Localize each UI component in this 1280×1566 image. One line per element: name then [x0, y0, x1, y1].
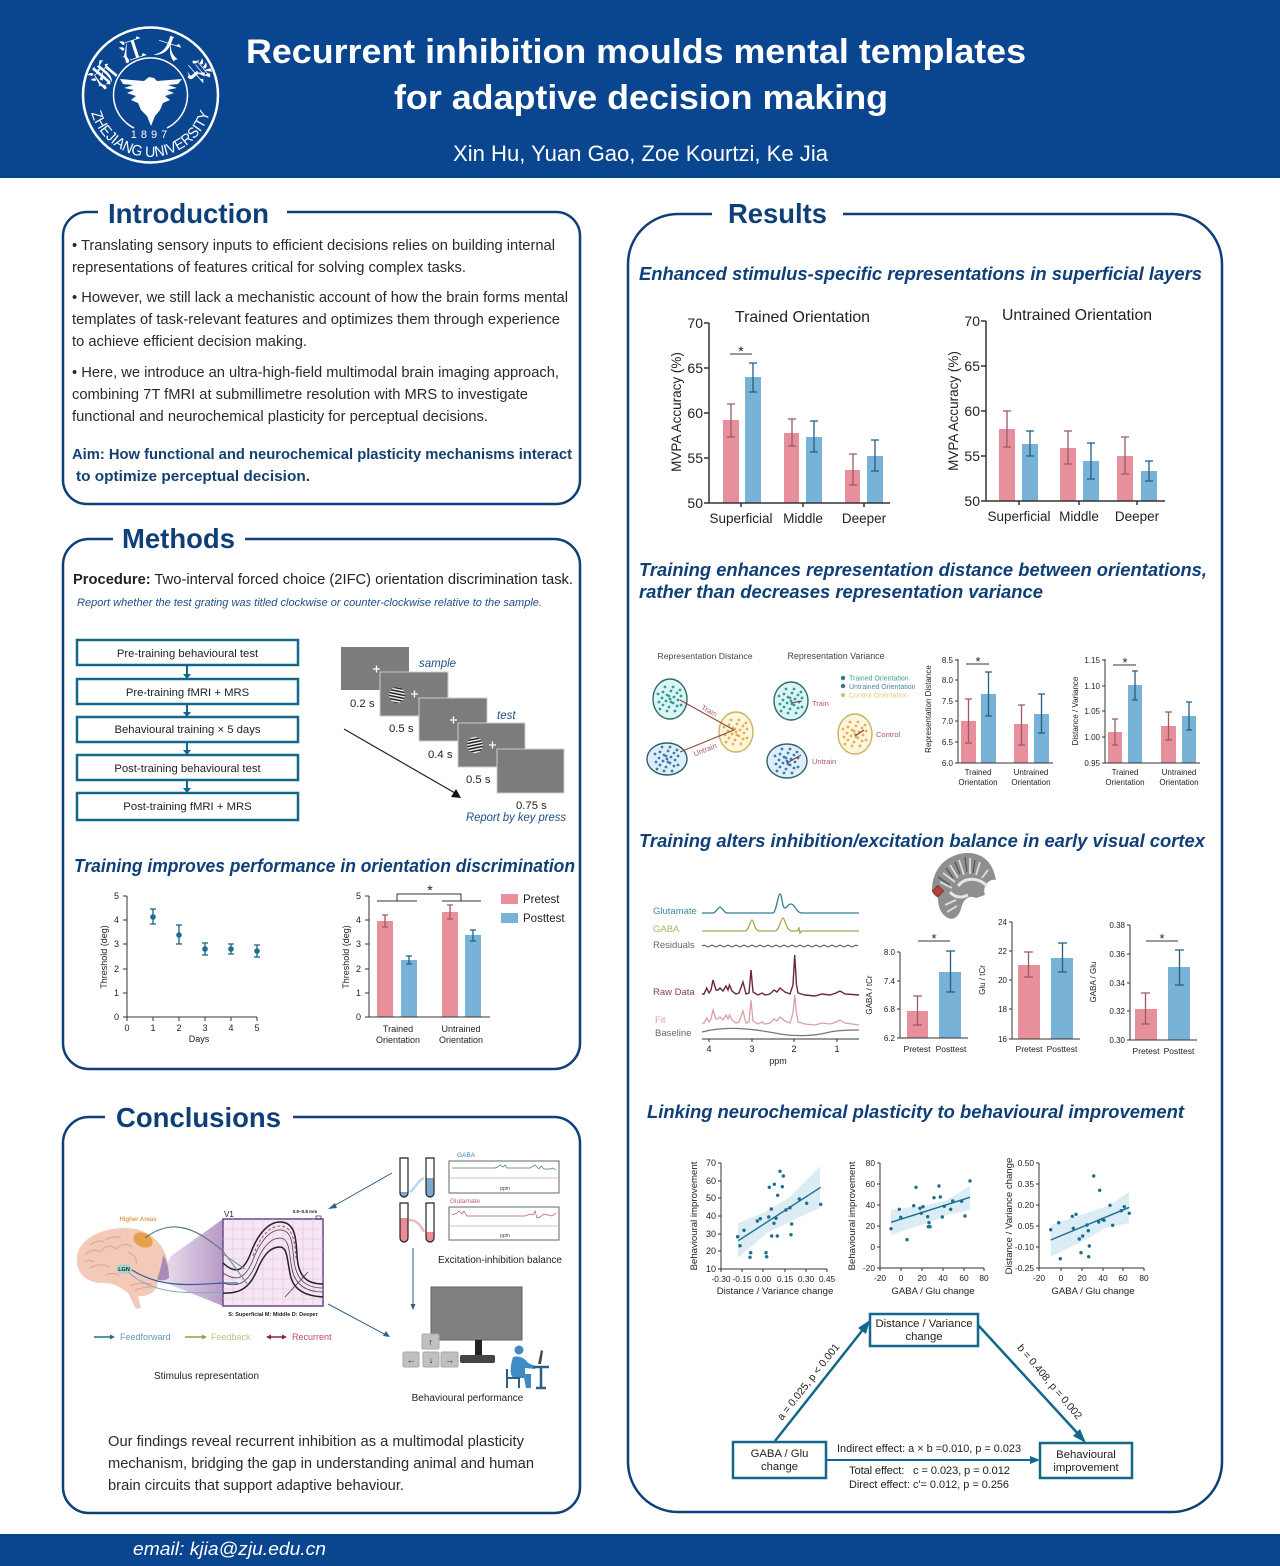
legend: pretest/posttest: Pretest [523, 894, 560, 906]
bar chart: trained orientation: Superficial [709, 511, 773, 526]
diagram: behavioural performance: ↑ [428, 1337, 433, 1347]
bar chart: Glu tCr: Posttest [1047, 1044, 1078, 1054]
bar chart: distance variance: 1.10 [1084, 682, 1101, 691]
scatter plot: behaviour vs GABA Glu: GABA / Glu change [891, 1286, 975, 1297]
scatter plot: behaviour vs GABA Glu: Behavioural improvement [847, 1161, 858, 1270]
bar chart: threshold pre/post: 4 [356, 915, 361, 925]
bar chart: distance variance: 1.05 [1084, 707, 1101, 716]
flowchart: training procedure: Post-training behavioural test [114, 763, 262, 775]
mediation diagram: Total effect: c = 0.023, p = 0.012 [849, 1465, 1010, 1477]
conclusion text: brain circuits that support adaptive behaviour. [108, 1478, 404, 1494]
bar chart: trained orientation: Middle [783, 511, 823, 526]
legend: connection types: Recurrent [292, 1332, 332, 1342]
task timeline: 0.5 s [466, 774, 491, 786]
line chart: threshold by day: 3 [202, 1023, 208, 1033]
scatter plot: distance variance vs GABA Glu: 0.05 [1018, 1221, 1034, 1231]
university logo [80, 26, 221, 164]
bar chart: GABA Glu: 0.38 [1109, 921, 1126, 930]
legend: connection types: Feedforward [120, 1332, 171, 1342]
bar chart: trained orientation: 50 [687, 495, 703, 511]
diagram: representation distance and variance: Untrain [812, 757, 836, 766]
bar chart: Glu tCr: 16 [998, 1035, 1008, 1044]
line chart: threshold by day: 4 [228, 1023, 234, 1033]
mediation diagram: GABA / Glu [751, 1448, 808, 1460]
bar chart: distance variance: 1.15 [1084, 656, 1101, 665]
spectra: GABA and glutamate: ppm [500, 1186, 510, 1192]
bar chart: GABA Glu: 0.36 [1109, 950, 1126, 959]
scatter plot: distance variance vs GABA Glu: Distance / Variance change [1004, 1158, 1015, 1274]
bar chart: representation distance: 6.0 [942, 759, 954, 768]
scatter plot: behaviour vs GABA Glu: 60 [866, 1179, 875, 1189]
subheading: training improves performance: Training improves performance in orientation discrimination [74, 856, 575, 876]
university logo: 江 [114, 28, 149, 70]
bar chart: representation distance: 7.0 [942, 717, 954, 726]
mediation diagram: b = 0.408, p = 0.002 [1014, 1342, 1084, 1422]
scatter plot: distance variance vs GABA Glu: -0.25 [1015, 1263, 1034, 1273]
scatter plot: behaviour vs GABA Glu [847, 1158, 989, 1297]
spectra: GABA and glutamate [449, 1152, 559, 1240]
introduction text: combining 7T fMRI at submillimetre resolution with MRS to investigate [72, 387, 528, 403]
legend: orientations: Untrained Orientation [849, 684, 916, 691]
scatter plot: behaviour vs distance variance [689, 1158, 835, 1297]
scatter plot: behaviour vs distance variance: 40 [706, 1211, 716, 1221]
conclusion text: mechanism, bridging the gap in understanding animal and human [108, 1456, 534, 1472]
subheading: linking plasticity: Linking neurochemical plasticity to behavioural improvement [647, 1101, 1185, 1122]
title: Recurrent inhibition moulds mental templates [246, 33, 1026, 71]
bar chart: trained orientation: 60 [687, 405, 703, 421]
bar chart: trained orientation: MVPA Accuracy (%) [669, 352, 684, 472]
mediation diagram: Direct effect: c'= 0.012, p = 0.256 [849, 1479, 1009, 1491]
scatter plot: behaviour vs GABA Glu: 0 [870, 1242, 875, 1252]
bar chart: untrained orientation: Middle [1059, 509, 1099, 524]
line chart: threshold by day: 5 [114, 891, 119, 901]
bar chart: distance variance: * [1122, 655, 1128, 670]
task timeline: 0.75 s [516, 800, 547, 812]
bar chart: representation distance: * [975, 654, 981, 669]
bar chart: Glu tCr: 22 [998, 947, 1008, 956]
bar chart: trained orientation: 55 [687, 450, 703, 466]
mediation diagram: a = 0.025, p < 0.001 [775, 1341, 842, 1423]
diagram: representation distance and variance: Train [700, 703, 719, 719]
scatter plot: behaviour vs distance variance: 50 [706, 1193, 716, 1203]
scatter plot: behaviour vs GABA Glu: -20 [874, 1273, 886, 1283]
bar chart: untrained orientation: Deeper [1115, 509, 1160, 524]
bar chart: GABA tCr: 8.0 [884, 948, 896, 957]
line chart: threshold by day: Threshold (deg) [99, 925, 109, 989]
heading: conclusions: Conclusions [116, 1102, 281, 1133]
diagram: excitation-inhibition balance: Excitation-inhibition balance [438, 1255, 562, 1266]
bar chart: distance variance: 0.95 [1084, 759, 1101, 768]
bar chart: GABA Glu: GABA / Glu [1089, 962, 1098, 1002]
bar chart: threshold pre/post: Orientation [376, 1035, 420, 1045]
scatter plot: behaviour vs distance variance: -0.30 [711, 1274, 731, 1284]
bar chart: untrained orientation: 70 [964, 313, 980, 329]
legend: pretest/posttest [501, 894, 565, 925]
diagram: behavioural performance: Behavioural performance [412, 1393, 524, 1404]
line chart: threshold by day: 1 [114, 988, 119, 998]
scatter plot: distance variance vs GABA Glu: 0.35 [1018, 1179, 1034, 1189]
diagram: stimulus representation: LGN [118, 1267, 130, 1273]
bar chart: representation distance: 8.5 [942, 656, 954, 665]
panel: introduction [63, 198, 580, 504]
scatter plot: behaviour vs distance variance: Distance / Variance change [717, 1286, 833, 1297]
university logo: 学 [177, 50, 221, 93]
scatter plot: behaviour vs GABA Glu: 40 [938, 1273, 948, 1283]
subheading: superficial layers: Enhanced stimulus-specific representations in superficial layers [639, 263, 1202, 284]
diagram: excitation-inhibition balance [328, 1152, 562, 1337]
scatter plot: distance variance vs GABA Glu: 0 [1059, 1273, 1064, 1283]
scatter plot: distance variance vs GABA Glu: -0.10 [1015, 1242, 1034, 1252]
contact email: email: kjia@zju.edu.cn [133, 1539, 326, 1559]
diagram: representation distance and variance: Representation Distance [657, 651, 753, 661]
subheading: representation distance [639, 559, 1207, 602]
scatter plot: behaviour vs GABA Glu: 20 [917, 1273, 927, 1283]
bar chart: GABA Glu: 0.32 [1109, 1007, 1126, 1016]
bar chart: threshold pre/post: Untrained [441, 1024, 481, 1034]
diagram: representation distance and variance: Untrain [692, 741, 718, 758]
bar chart: representation distance: Trained [965, 768, 991, 777]
subheading: representation distance: rather than decreases representation variance [639, 581, 1043, 602]
scatter plot: behaviour vs distance variance: 30 [706, 1229, 716, 1239]
MRS spectra: 2 [791, 1044, 797, 1054]
scatter plot: distance variance vs GABA Glu: 20 [1077, 1273, 1087, 1283]
scatter plot: behaviour vs distance variance: 0.30 [798, 1274, 814, 1284]
scatter plot: behaviour vs distance variance: 0.00 [755, 1274, 771, 1284]
icon: person at desk [507, 1346, 549, 1388]
MRS spectra: 4 [706, 1044, 712, 1054]
subheading: representation distance: Training enhances representation distance between orientations, [639, 559, 1207, 580]
legend: orientations: Trained Orientation [849, 676, 909, 682]
bar chart: Glu tCr: Pretest [1016, 1044, 1043, 1054]
aim statement [72, 447, 572, 485]
panel: results [628, 198, 1222, 1512]
task timeline [341, 647, 566, 824]
bar chart: representation distance: 8.0 [942, 676, 954, 685]
bar chart: threshold pre/post: * [427, 882, 433, 898]
bar chart: trained orientation: Trained Orientation [735, 309, 870, 326]
V1 box [223, 1209, 323, 1318]
mediation diagram: Behavioural [1056, 1449, 1116, 1461]
MRS spectra: Fit [655, 1015, 666, 1026]
scatter plot: behaviour vs distance variance: 10 [706, 1264, 716, 1274]
mediation diagram: Distance / Variance [875, 1318, 973, 1330]
introduction text: representations of features critical for solving complex tasks. [72, 260, 466, 276]
scatter plot: behaviour vs GABA Glu: 80 [979, 1273, 989, 1283]
scatter plot: behaviour vs GABA Glu: 40 [866, 1200, 875, 1210]
bar chart: GABA tCr: GABA / tCr [865, 975, 874, 1015]
scatter plot: distance variance vs GABA Glu: 0.20 [1018, 1200, 1034, 1210]
scatter plot: distance variance vs GABA Glu: GABA / Glu change [1051, 1286, 1135, 1297]
bar chart: untrained orientation: MVPA Accuracy (%) [946, 351, 961, 471]
MRS spectra: Raw Data [653, 987, 695, 998]
conclusion text [108, 1434, 534, 1494]
bar chart: GABA Glu [1089, 921, 1197, 1056]
diagram: behavioural performance: ← [406, 1355, 416, 1365]
bar chart: threshold pre/post: 2 [356, 964, 361, 974]
MRS spectra: Residuals [653, 940, 695, 951]
MRS spectra: Baseline [655, 1028, 691, 1039]
task timeline: 0.5 s [389, 723, 414, 735]
scatter plot: behaviour vs distance variance: 70 [706, 1158, 716, 1168]
bar chart: threshold pre/post [341, 882, 565, 1045]
task timeline: 0.2 s [350, 698, 375, 710]
scatter plot: behaviour vs GABA Glu: 60 [959, 1273, 969, 1283]
line chart: threshold by day [99, 891, 260, 1044]
diagram: stimulus representation: Stimulus representation [154, 1371, 259, 1382]
bar chart: Glu tCr [978, 918, 1080, 1054]
panel: conclusions [63, 1102, 580, 1513]
flowchart: training procedure: Post-training fMRI + MRS [123, 801, 252, 813]
spectra: GABA and glutamate: ppm [500, 1233, 510, 1239]
scatter plot: distance variance vs GABA Glu [1004, 1158, 1149, 1297]
legend: connection types: Feedback [211, 1332, 251, 1342]
procedure text: Procedure: Two-interval forced choice (2IFC) orientation discrimination task. [73, 571, 573, 588]
bar chart: distance variance: 1.00 [1084, 733, 1101, 742]
bar chart: threshold pre/post: Trained [383, 1024, 413, 1034]
diagram: representation distance and variance: Representation Variance [787, 651, 885, 661]
procedure text [73, 571, 573, 609]
V1 box: S: Superficial M: Middle D: Deeper [228, 1312, 319, 1318]
university logo: 大 [152, 26, 186, 68]
title [246, 33, 1026, 117]
scatter plot: behaviour vs GABA Glu: 0 [899, 1273, 904, 1283]
aim statement: to optimize perceptual decision. [76, 469, 310, 485]
bar chart: threshold pre/post: 0 [356, 1012, 361, 1022]
legend: orientations [841, 676, 916, 700]
MRS spectra: GABA [653, 924, 680, 935]
bar chart: untrained orientation: Untrained Orientation [1002, 307, 1152, 324]
bar chart: threshold pre/post: 5 [356, 891, 361, 901]
bar chart: Glu tCr: Glu / tCr [978, 965, 987, 995]
bar chart: representation distance: Orientation [958, 778, 998, 787]
line chart: threshold by day: 0 [114, 1012, 119, 1022]
mediation diagram [733, 1314, 1132, 1491]
scatter plot: distance variance vs GABA Glu: 60 [1118, 1273, 1128, 1283]
scatter plot: behaviour vs GABA Glu: 20 [866, 1221, 875, 1231]
bar chart: untrained orientation: 50 [964, 493, 980, 509]
bar chart: representation distance: Representation Distance [924, 665, 933, 753]
introduction text: templates of task-relevant features and optimizes them through experience [72, 312, 560, 328]
authors: Xin Hu, Yuan Gao, Zoe Kourtzi, Ke Jia [453, 141, 829, 166]
bar chart: threshold pre/post: 1 [356, 988, 361, 998]
task timeline: 0.4 s [428, 749, 453, 761]
line chart: threshold by day: 5 [254, 1023, 260, 1033]
introduction text: • However, we still lack a mechanistic account of how the brain forms mental [72, 290, 568, 306]
procedure text: Report whether the test grating was titled clockwise or counter-clockwise relative to the sample. [77, 597, 542, 609]
bar chart: distance variance: Untrained [1162, 768, 1196, 777]
bar chart: GABA Glu: 0.30 [1109, 1036, 1126, 1045]
bar chart: distance variance: Trained [1112, 768, 1138, 777]
university logo: 1897 [131, 129, 171, 141]
introduction text: to achieve efficient decision making. [72, 334, 307, 350]
task timeline: test [497, 710, 516, 722]
bar chart: untrained orientation: 60 [964, 403, 980, 419]
scatter plot: distance variance vs GABA Glu: 40 [1098, 1273, 1108, 1283]
bar chart: GABA tCr: Posttest [936, 1044, 967, 1054]
scatter plot: behaviour vs distance variance: 0.45 [819, 1274, 835, 1284]
spectra: GABA and glutamate: GABA [457, 1152, 476, 1159]
bar chart: threshold pre/post: 3 [356, 939, 361, 949]
bar chart: Glu tCr: 18 [998, 1005, 1008, 1014]
task timeline: Report by key press [466, 812, 566, 824]
mediation diagram: change [905, 1331, 943, 1343]
header banner [0, 0, 1280, 178]
diagram: stimulus representation [77, 1209, 332, 1382]
flowchart: training procedure: Pre-training behavioural test [117, 648, 259, 660]
scatter plot: behaviour vs GABA Glu: 80 [866, 1158, 875, 1168]
bar chart: GABA tCr: 7.4 [884, 977, 896, 986]
university logo: 浙 [80, 53, 124, 96]
MRS spectra: 3 [749, 1044, 755, 1054]
introduction text: functional and neurochemical plasticity for perceptual decisions. [72, 409, 488, 425]
line chart: threshold by day: 2 [114, 964, 119, 974]
scatter plot: behaviour vs distance variance: Behavioural improvement [689, 1161, 700, 1270]
bar chart: threshold pre/post: Threshold (deg) [341, 925, 351, 989]
bar chart: trained orientation: * [738, 343, 744, 359]
mediation diagram: Indirect effect: a × b =0.010, p = 0.023 [837, 1443, 1021, 1455]
bar chart: GABA tCr: 6.8 [884, 1005, 896, 1014]
diagram: behavioural performance: → [445, 1355, 454, 1365]
panel: methods [63, 523, 580, 1069]
bar chart: untrained orientation [946, 307, 1165, 524]
bar chart: distance variance: Orientation [1159, 778, 1199, 787]
introduction text: • Here, we introduce an ultra-high-field multimodal brain imaging approach, [72, 365, 559, 381]
bar chart: representation distance: Untrained [1014, 768, 1048, 777]
mediation diagram: change [761, 1461, 798, 1473]
bar chart: representation distance: 7.5 [942, 697, 954, 706]
diagram: representation distance and variance [647, 651, 916, 778]
V1 box: V1 [224, 1210, 234, 1219]
bar chart: representation distance [924, 654, 1053, 787]
spectra: GABA and glutamate: Glutamate [450, 1198, 480, 1205]
bar chart: threshold pre/post: Orientation [439, 1035, 483, 1045]
bar chart: trained orientation: 70 [687, 315, 703, 331]
bar chart: trained orientation [669, 309, 890, 526]
MRS spectra [653, 894, 859, 1066]
bar chart: GABA Glu: Posttest [1164, 1046, 1195, 1056]
bar chart: trained orientation: 65 [687, 360, 703, 376]
scatter plot: distance variance vs GABA Glu: 0.50 [1018, 1158, 1034, 1168]
line chart: threshold by day: 4 [114, 915, 119, 925]
introduction text [72, 238, 568, 425]
label: higher areas: Higher Areas [119, 1217, 157, 1223]
aim statement: Aim: How functional and neurochemical plasticity mechanisms interact [72, 447, 572, 463]
diagram: representation distance and variance: Control [876, 730, 901, 739]
mediation diagram: improvement [1053, 1462, 1120, 1474]
diagram: representation distance and variance: Train [812, 699, 829, 708]
scatter plot: distance variance vs GABA Glu: 80 [1139, 1273, 1149, 1283]
line chart: threshold by day: Days [189, 1034, 210, 1044]
heading: methods: Methods [122, 523, 235, 554]
V1 box: 0.5~0.8 mm [293, 1209, 317, 1214]
bar chart: GABA tCr: 6.2 [884, 1034, 896, 1043]
subheading: inhibition excitation: Training alters inhibition/excitation balance in early visual cortex [639, 830, 1206, 851]
MRS spectra: ppm [769, 1056, 787, 1066]
bar chart: distance variance [1071, 655, 1200, 787]
bar chart: GABA tCr: Pretest [904, 1044, 931, 1054]
MRS spectra: Glutamate [653, 906, 697, 917]
scatter plot: behaviour vs distance variance: 0.15 [777, 1274, 793, 1284]
conclusion text: Our findings reveal recurrent inhibition as a multimodal plasticity [108, 1434, 525, 1450]
bar chart: GABA tCr: * [931, 931, 937, 946]
heading: introduction: Introduction [108, 198, 269, 229]
bar chart: distance variance: Orientation [1105, 778, 1145, 787]
legend: pretest/posttest: Posttest [523, 913, 565, 925]
scatter plot: behaviour vs distance variance: -0.15 [732, 1274, 752, 1284]
line chart: threshold by day: 3 [114, 939, 119, 949]
scatter plot: behaviour vs distance variance: 60 [706, 1176, 716, 1186]
bar chart: distance variance: Distance / Variance [1071, 676, 1080, 745]
legend: orientations: Control Orientation [849, 692, 908, 700]
line chart: threshold by day: 1 [150, 1023, 156, 1033]
scatter plot: behaviour vs distance variance: 20 [706, 1246, 716, 1256]
icon: brain [932, 853, 996, 919]
university logo: ZHEJIANG UNIVERSITY [91, 110, 208, 157]
bar chart: untrained orientation: Superficial [987, 509, 1051, 524]
line chart: threshold by day: 2 [176, 1023, 182, 1033]
MRS spectra: 1 [834, 1044, 840, 1054]
flowchart: training procedure: Pre-training fMRI + MRS [126, 687, 250, 699]
footer banner [0, 1534, 1280, 1566]
bar chart: representation distance: 6.5 [942, 738, 954, 747]
scatter plot: behaviour vs GABA Glu: -20 [863, 1263, 875, 1273]
line chart: threshold by day: 0 [124, 1023, 130, 1033]
flowchart: training procedure [77, 640, 298, 820]
heading: results: Results [728, 198, 827, 229]
bar chart: GABA tCr [865, 931, 968, 1054]
bar chart: trained orientation: Deeper [842, 511, 887, 526]
diagram: behavioural performance [403, 1287, 549, 1404]
bar chart: Glu tCr: 24 [998, 918, 1008, 927]
bar chart: representation distance: Orientation [1011, 778, 1051, 787]
legend: connection types [94, 1332, 332, 1342]
task timeline: sample [419, 658, 456, 670]
diagram: behavioural performance: ↓ [429, 1355, 433, 1365]
flowchart: training procedure: Behavioural training × 5 days [114, 724, 261, 736]
bar chart: GABA Glu: Pretest [1133, 1046, 1160, 1056]
bar chart: GABA Glu: * [1159, 931, 1165, 946]
bar chart: GABA Glu: 0.34 [1109, 979, 1126, 988]
bar chart: untrained orientation: 55 [964, 448, 980, 464]
bar chart: Glu tCr: 20 [998, 976, 1008, 985]
title: for adaptive decision making [394, 79, 888, 117]
introduction text: • Translating sensory inputs to efficient decisions relies on building internal [72, 238, 555, 254]
scatter plot: distance variance vs GABA Glu: -20 [1033, 1273, 1045, 1283]
bar chart: untrained orientation: 65 [964, 358, 980, 374]
